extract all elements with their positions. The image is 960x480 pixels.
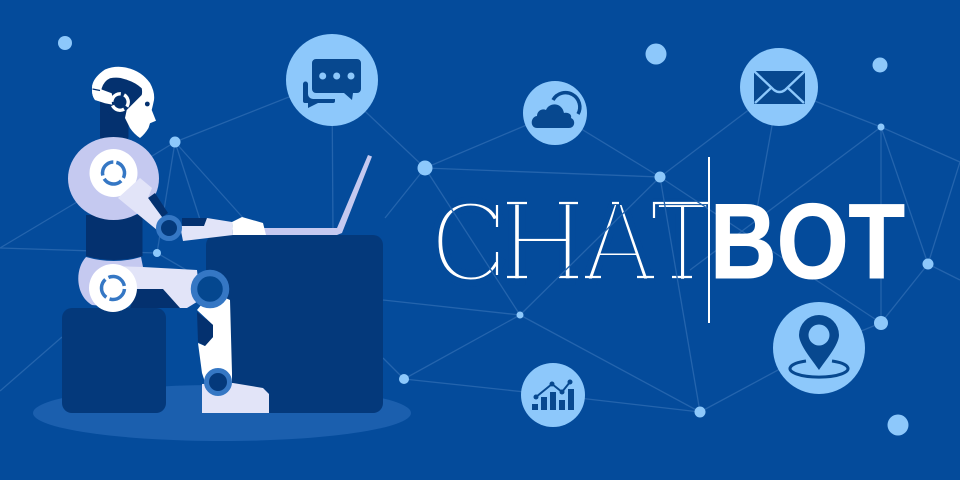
- network lines: [0, 80, 960, 412]
- robot thigh: [113, 266, 200, 308]
- robot torso lower: [86, 215, 142, 260]
- icon: location pin: [773, 302, 865, 394]
- robot shin: [197, 292, 232, 385]
- floor shadow: [33, 385, 411, 441]
- robot calf shadow: [197, 312, 213, 346]
- laptop: [262, 155, 372, 235]
- robot: [68, 67, 269, 413]
- robot knee joint: [194, 273, 226, 305]
- robot neck: [100, 95, 128, 140]
- seat block: [62, 308, 166, 413]
- robot shoulder joint: [90, 149, 138, 197]
- icon: cloud: [523, 81, 587, 145]
- robot thigh shadow: [130, 289, 185, 308]
- icon: envelope: [740, 48, 818, 126]
- desk block: [206, 235, 383, 413]
- title: CHAT thin lettering: C: [430, 176, 506, 307]
- title: CHAT thin lettering: A: [584, 176, 652, 307]
- robot ankle joint: [206, 370, 230, 394]
- robot foot: [202, 383, 269, 413]
- title: CHAT thin lettering: H: [503, 176, 582, 307]
- robot hip joint: [89, 264, 137, 312]
- robot arm: [118, 178, 266, 241]
- robot hip: [78, 257, 143, 308]
- title: CHAT thin lettering: T: [654, 176, 711, 307]
- robot chest: [68, 137, 159, 220]
- title divider line: [708, 157, 710, 323]
- icon: chat bubbles: [286, 34, 378, 126]
- robot head: [92, 67, 156, 138]
- small network nodes: [58, 36, 934, 436]
- title: BOT bold lettering: BOT: [710, 181, 905, 301]
- icon: growth chart: [521, 363, 585, 427]
